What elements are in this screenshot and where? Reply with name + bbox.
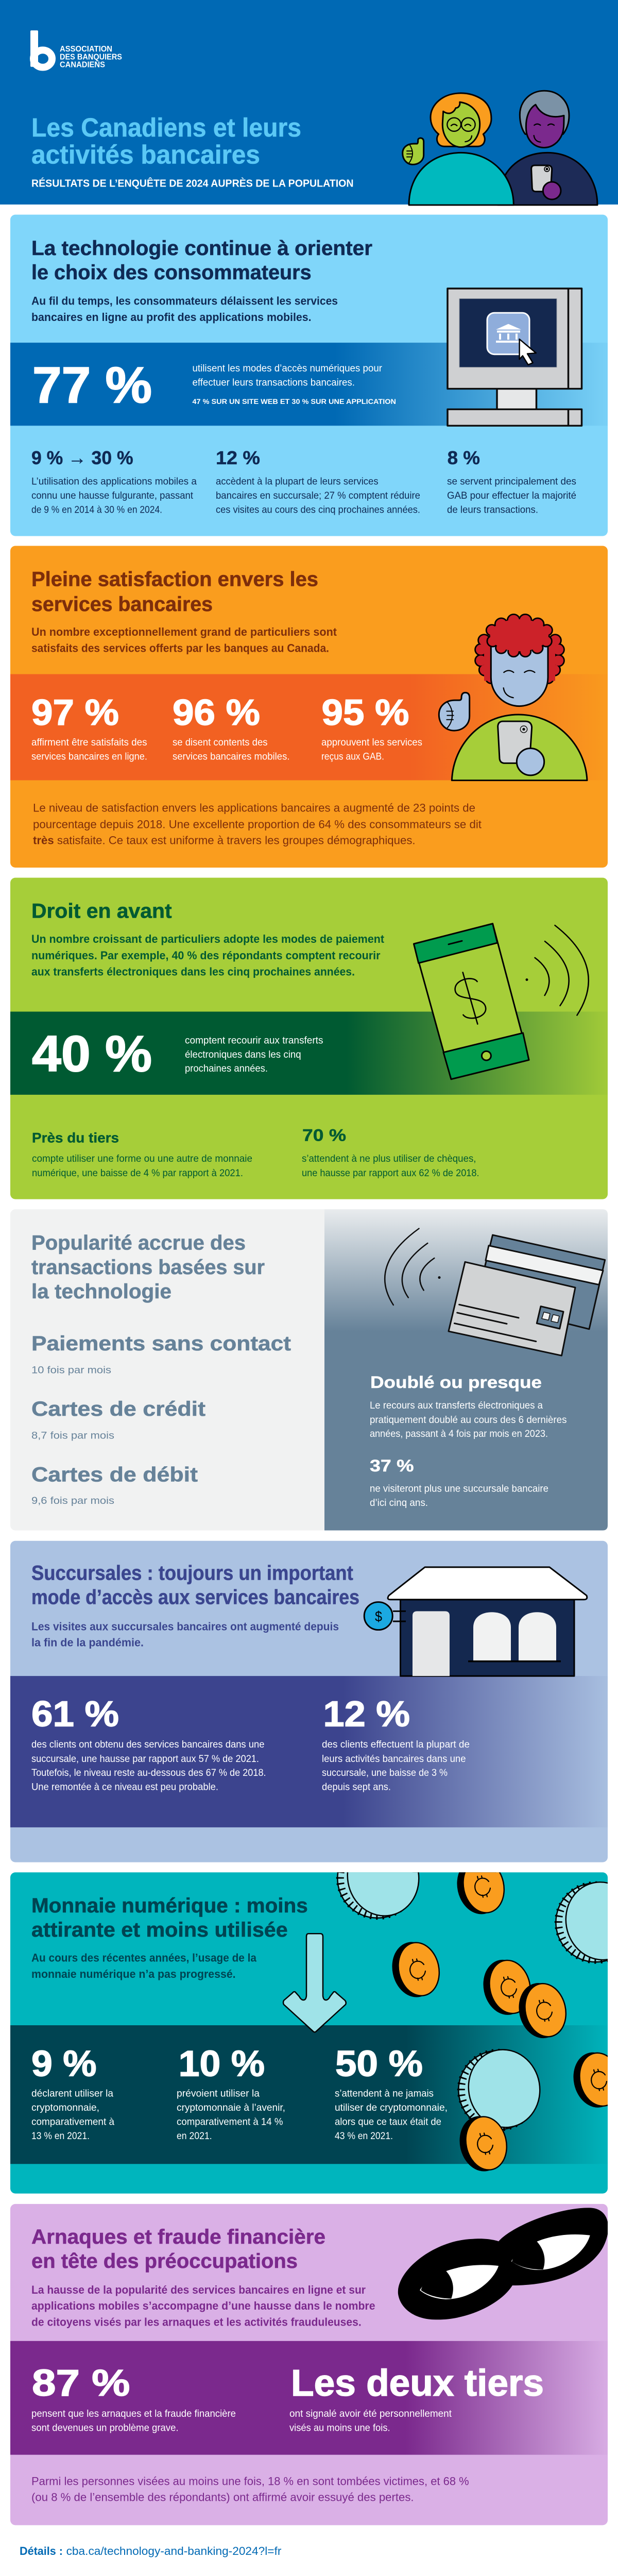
stat: 9 % to 30 % [31, 447, 197, 515]
heading: Monnaie numérique : moins [31, 1893, 308, 1917]
stat: 95 %: approuvent les services [321, 737, 422, 748]
logo: Association des banquiers canadiens: DES BANQUIERS [60, 53, 122, 62]
stat text: 77 %: effectuer leurs transactions bancaires. [193, 377, 355, 388]
stat: 12 %: depuis sept ans. [322, 1782, 391, 1793]
stat: 9 %: cryptomonnaie, [31, 2103, 99, 2113]
stat: 50 % [335, 2043, 448, 2142]
stat: 61 %: Toutefois, le niveau reste au-dessous des 67 % de 2018. [31, 1768, 266, 1778]
panel: arnaques et fraude [10, 2204, 608, 2525]
icon: two people with phone and thumbs up [403, 91, 597, 205]
stat: 10 %: comparativement à 14 % [177, 2117, 283, 2128]
icon: bank branch building: $ [375, 1608, 382, 1624]
intro text: de citoyens visés par les arnaques et les activités frauduleuses. [31, 2315, 362, 2329]
stat: 61 %: succursale, une hausse par rapport aux 57 % de 2021. [31, 1754, 259, 1765]
intro text: monnaie numérique n’a pas progressé. [31, 1967, 236, 1980]
heading [31, 2225, 325, 2273]
stat: 50 %: 50 % [335, 2043, 423, 2084]
heading: Pleine satisfaction envers les [31, 567, 318, 591]
intro text: Au cours des récentes années, l’usage de la [31, 1951, 256, 1964]
stat: 9 % to 30 %: de 9 % en 2014 à 30 % en 2024. [31, 504, 162, 515]
text block: victimes: Parmi les personnes visées au moins une fois, 18 % en sont tombées victimes, et 68 % [31, 2475, 469, 2487]
text block: satisfaction applications: très satisfaite. Ce taux est uniforme à travers les groupes démographiques. [33, 834, 416, 846]
heading: La technologie continue à orienter [31, 236, 372, 260]
header band [0, 0, 618, 205]
stat: 8 %: 8 % [448, 447, 480, 468]
stat: cartes de débit: 9,6 fois par mois [31, 1496, 114, 1506]
heading: Succursales : toujours un important [31, 1561, 353, 1584]
title [31, 112, 301, 169]
intro text [31, 625, 337, 654]
heading: le choix des consommateurs [31, 260, 312, 284]
stat: 50 %: s’attendent à ne jamais [335, 2089, 434, 2099]
heading: Popularité accrue des [31, 1231, 246, 1254]
stat: 9 % to 30 %: L’utilisation des applications mobiles a [31, 476, 197, 487]
stat: paiements sans contact: 10 fois par mois [31, 1365, 111, 1376]
stat: les deux tiers: Les deux tiers [291, 2362, 544, 2404]
heading: services bancaires [31, 592, 213, 616]
stat: 37 %: d’ici cinq ans. [370, 1498, 428, 1509]
stat: 40 %: 40 % [32, 1026, 152, 1082]
icon: coins [331, 1833, 618, 2175]
stat text: 77 % [193, 363, 396, 406]
text block: satisfaction applications: Le niveau de satisfaction envers les applications bancaires a augmenté de 23 points de [33, 802, 475, 815]
panel: satisfaction [10, 546, 608, 868]
stat: 9 % to 30 %: connu une hausse fulgurante, passant [31, 490, 194, 501]
stat: 70 %: une hausse par rapport aux 62 % de 2018. [302, 1168, 479, 1179]
stat: doublé ou presque: années, passant à 4 fois par mois en 2023. [370, 1429, 548, 1439]
icon: smartphone with dollar and contactless waves [414, 924, 589, 1079]
stat: 12 %: ces visites au cours des cinq prochaines années. [216, 504, 420, 515]
icon: computer monitor with bank app [448, 289, 582, 426]
stat: les deux tiers [289, 2362, 544, 2433]
intro text: La hausse de la popularité des services bancaires en ligne et sur [31, 2283, 366, 2296]
stat: cartes de débit: Cartes de débit [31, 1463, 198, 1486]
logo: Association des banquiers canadiens: CANADIENS [60, 61, 105, 70]
band: 40 % [10, 1012, 608, 1095]
stat: près du tiers: numérique, une baisse de 4 % par rapport à 2021. [32, 1168, 243, 1179]
stat: 70 % [302, 1126, 479, 1179]
text block: satisfaction applications [33, 802, 482, 846]
stat: paiements sans contact [31, 1331, 291, 1376]
stat: 87 % [31, 2362, 236, 2433]
band: succursales stats [10, 1676, 608, 1827]
intro text: Un nombre exceptionnellement grand de particuliers sont [31, 625, 337, 638]
band: fraude stats [10, 2341, 608, 2455]
stat: 9 % to 30 %: 9 % → 30 % [31, 447, 133, 468]
stat: 12 %: succursale, une baisse de 3 % [322, 1768, 448, 1778]
stat: 61 %: Une remontée à ce niveau est peu probable. [31, 1782, 218, 1793]
stat: cartes de crédit [31, 1397, 206, 1441]
stat: 12 %: accèdent à la plupart de leurs services [216, 476, 379, 487]
stat: 70 %: 70 % [302, 1126, 346, 1145]
stat: 37 %: 37 % [370, 1456, 414, 1475]
stat: 9 %: 13 % en 2021. [31, 2131, 90, 2142]
intro text: bancaires en ligne au profit des applications mobiles. [31, 310, 312, 324]
stat: 50 %: alors que ce taux était de [335, 2117, 441, 2128]
heading [31, 1561, 359, 1608]
stat: 10 %: prévoient utiliser la [177, 2089, 260, 2099]
heading: Droit en avant [31, 899, 172, 922]
icon: bank cards with contactless waves [385, 1229, 605, 1355]
footer: details link: cba.ca/technology-and-banking-2024?l=fr [66, 2544, 282, 2557]
stat: 12 %: des clients effectuent la plupart de [322, 1739, 470, 1750]
stat: 9 %: déclarent utiliser la [31, 2089, 113, 2099]
stat: 96 %: services bancaires mobiles. [173, 752, 289, 762]
stat: 9 % [31, 2043, 114, 2142]
stat: 96 %: se disent contents des [173, 737, 268, 748]
stat text: 40 %: électroniques dans les cinq [185, 1049, 301, 1060]
stat: 10 %: 10 % [179, 2043, 265, 2084]
logo: Association des banquiers canadiens [30, 30, 122, 70]
stat: 61 %: des clients ont obtenu des services bancaires dans une [31, 1739, 265, 1750]
stat: près du tiers: compte utiliser une forme ou une autre de monnaie [32, 1154, 252, 1164]
icon: person with curly hair, phone and thumbs up [439, 614, 587, 781]
stat: cartes de crédit: 8,7 fois par mois [31, 1430, 114, 1441]
heading: en tête des préoccupations [31, 2249, 298, 2273]
heading: attirante et moins utilisée [31, 1918, 288, 1941]
stat: 97 % [31, 692, 147, 762]
heading: la technologie [31, 1279, 171, 1303]
stat: doublé ou presque: pratiquement doublé au cours des 6 dernières [370, 1415, 567, 1426]
stat: 12 %: 12 % [323, 1693, 410, 1734]
stat: 97 %: 97 % [31, 692, 119, 733]
stat text: 77 %: utilisent les modes d’accès numériques pour [193, 363, 382, 374]
panel: right column [324, 1209, 608, 1531]
arrow: down [283, 1934, 346, 2032]
stat: 97 %: affirment être satisfaits des [31, 737, 147, 748]
heading: transactions basées sur [31, 1255, 265, 1279]
stat: 61 %: 61 % [31, 1693, 119, 1734]
intro text: satisfaits des services offerts par les banques au Canada. [31, 641, 329, 654]
text block: victimes: (ou 8 % de l’ensemble des répondants) ont affirmé avoir essuyé des pertes. [31, 2491, 414, 2504]
intro text [31, 1951, 256, 1980]
intro text: numériques. Par exemple, 40 % des répondants comptent recourir [31, 948, 381, 962]
stat: 8 %: GAB pour effectuer la majorité [447, 490, 576, 501]
text block: satisfaction applications: pourcentage depuis 2018. Une excellente proportion de 64 % des consommateurs se dit [33, 818, 482, 831]
stat: 50 %: 43 % en 2021. [335, 2131, 393, 2142]
stat: 8 %: de leurs transactions. [447, 504, 538, 515]
panel: droit en avant [10, 878, 608, 1199]
intro text: aux transferts électroniques dans les cinq prochaines années. [31, 964, 355, 978]
stat: 96 %: 96 % [173, 692, 260, 733]
stat: 97 %: services bancaires en ligne. [31, 752, 147, 762]
stat: près du tiers: Près du tiers [32, 1130, 119, 1145]
heading [31, 567, 318, 616]
stat: 87 %: 87 % [32, 2362, 130, 2404]
stat: 10 % [177, 2043, 285, 2142]
icon: bank branch building [364, 1567, 587, 1676]
stat: cartes de crédit: Cartes de crédit [31, 1397, 206, 1420]
stat: 61 % [31, 1693, 266, 1793]
stat: les deux tiers: ont signalé avoir été personnellement [289, 2409, 452, 2419]
stat: 10 %: en 2021. [177, 2131, 212, 2142]
intro text [31, 2283, 375, 2329]
stat: doublé ou presque: Le recours aux transferts électroniques a [370, 1400, 543, 1411]
stat: 9 %: 9 % [31, 2043, 97, 2084]
stat text: 40 % [185, 1036, 323, 1074]
intro text: applications mobiles s’accompagne d’une hausse dans le nombre [31, 2299, 375, 2312]
stat text: 40 %: prochaines années. [185, 1063, 268, 1074]
intro text: Les visites aux succursales bancaires ont augmenté depuis [31, 1620, 339, 1633]
intro text: la fin de la pandémie. [31, 1636, 144, 1649]
band: monnaie stats [10, 2025, 608, 2164]
panel: popularité des transactions [10, 1209, 608, 1531]
heading: mode d’accès aux services bancaires [31, 1585, 359, 1608]
intro text [31, 1620, 339, 1649]
stat: cartes de débit [31, 1463, 198, 1506]
stat: 8 %: se servent principalement des [447, 476, 576, 487]
stat: 9 %: comparativement à [31, 2117, 114, 2128]
stat: 95 %: 95 % [321, 692, 409, 733]
stat: 70 %: s’attendent à ne plus utiliser de chèques, [302, 1154, 476, 1164]
stat: 8 % [447, 447, 576, 515]
stat: 37 % [370, 1456, 548, 1509]
stat: 12 %: leurs activités bancaires dans une [322, 1754, 466, 1765]
icon: black eye mask [398, 2208, 608, 2319]
intro text: Un nombre croissant de particuliers adopte les modes de paiement [31, 932, 384, 945]
stat: 12 %: 12 % [216, 447, 260, 468]
heading [31, 1893, 308, 1941]
stat: 37 %: ne visiteront plus une succursale bancaire [370, 1484, 548, 1494]
logo: Association des banquiers canadiens: ASSOCIATION [60, 45, 112, 54]
intro text: Au fil du temps, les consommateurs délaissent les services [31, 294, 338, 307]
stat: doublé ou presque [370, 1372, 567, 1439]
subtitle: RÉSULTATS DE L’ENQUÊTE DE 2024 AUPRÈS DE LA POPULATION [31, 177, 354, 190]
stat: 12 % [322, 1693, 470, 1793]
heading [31, 1231, 265, 1303]
heading [31, 236, 372, 284]
stat: 10 %: cryptomonnaie à l’avenir, [177, 2103, 285, 2113]
panel: succursales [10, 1541, 608, 1862]
band: satisfaction stats [10, 674, 608, 780]
text block: victimes [31, 2475, 469, 2504]
stat: 87 %: pensent que les arnaques et la fraude financière [31, 2409, 236, 2419]
intro text [31, 932, 384, 978]
stat: 50 %: utiliser de cryptomonnaie, [335, 2103, 448, 2113]
stat: paiements sans contact: Paiements sans contact [31, 1331, 291, 1355]
stat text: 77 %: 47 % SUR UN SITE WEB ET 30 % SUR UNE APPLICATION [193, 398, 396, 406]
stat: 87 %: sont devenues un problème grave. [31, 2423, 179, 2433]
panel: technologie [10, 215, 608, 536]
stat: 96 % [173, 692, 289, 762]
title: Les Canadiens et leurs [31, 112, 301, 142]
stat: 95 % [321, 692, 422, 762]
heading: Arnaques et fraude financière [31, 2225, 325, 2248]
stat text: 40 %: comptent recourir aux transferts [185, 1036, 323, 1046]
band: 77 % [10, 343, 608, 426]
stat: près du tiers [32, 1130, 252, 1179]
footer: details link: Détails : [20, 2544, 63, 2557]
stat: 12 % [216, 447, 420, 515]
intro text [31, 294, 338, 324]
title: activités bancaires [31, 140, 260, 169]
stat: les deux tiers: visés au moins une fois. [289, 2423, 390, 2433]
stat: 77 %: 77 % [32, 357, 152, 414]
stat: 12 %: bancaires en succursale; 27 % comptent réduire [216, 490, 420, 501]
stat: doublé ou presque: Doublé ou presque [370, 1372, 542, 1392]
stat: 95 %: reçus aux GAB. [321, 752, 384, 762]
panel: monnaie numérique [10, 1872, 608, 2194]
